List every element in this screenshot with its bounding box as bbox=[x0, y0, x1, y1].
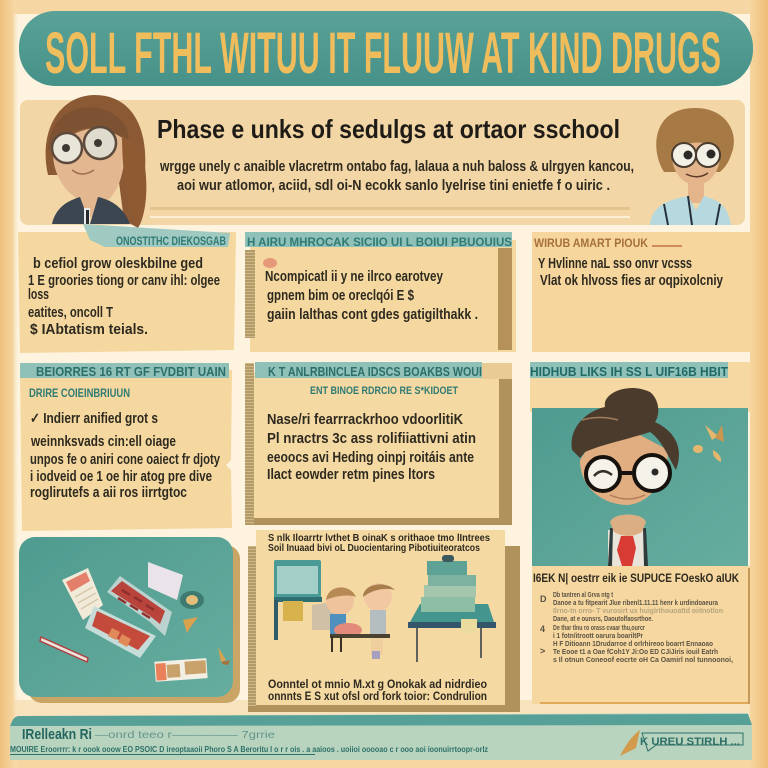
panel text: $ IAbtatism teials. bbox=[30, 322, 148, 338]
panel text: b cefiol grow oleskbilne ged bbox=[33, 256, 203, 272]
panel small text: Te Eooe t1 a Oae fCoh1Y Ji:Oo ED CJiJiris iouil Eatrh bbox=[553, 649, 718, 656]
footer band bbox=[10, 713, 752, 760]
panel small text: 4 bbox=[540, 624, 545, 634]
logo bbox=[620, 730, 743, 756]
icon: card bbox=[148, 562, 183, 600]
panel text: Ncompicatl ii y ne ilrco earotvey bbox=[265, 269, 443, 285]
panel text: Vlat ok hlvoss fies ar oqpixolcniy bbox=[540, 273, 723, 289]
icon: scattered pieces bbox=[183, 617, 230, 665]
header band bbox=[245, 232, 512, 247]
panel small text: Db tantren al Grva ntg t bbox=[553, 592, 614, 599]
panel text: Pl nractrs 3c ass rolifiiattivni atin bbox=[267, 431, 476, 447]
panel: medication illustration bbox=[19, 537, 240, 703]
panel small text: i 1 fotn/itroott oarura boariltPr bbox=[553, 633, 643, 640]
panel text: top: Soil Inuaad bivi oL Duocientaring Pibotiuiteoratcos bbox=[268, 542, 480, 554]
icon: capsule bbox=[180, 591, 204, 609]
icon: bullet bbox=[263, 258, 277, 268]
icon: cap bbox=[186, 595, 198, 605]
header band bbox=[530, 362, 728, 378]
icon: boy with glasses bbox=[650, 108, 734, 225]
panel heading: HIDHUB LIKS IH SS L UIF16B HBIT bbox=[530, 364, 728, 379]
panel small text bbox=[540, 592, 733, 664]
icon: children bbox=[312, 583, 395, 659]
panel heading: WIRUB AMART PIOUK bbox=[534, 236, 648, 250]
footer subtext: —onrd teeo r————— 7grrie bbox=[95, 730, 276, 741]
icon: cigarette bbox=[40, 637, 88, 662]
panel text: 1 E groories tiong or canv ihl: olgee bbox=[28, 273, 220, 289]
icon: computer desk bbox=[274, 560, 322, 640]
panel: top centre bbox=[245, 232, 516, 352]
icon: pill box bbox=[85, 576, 172, 658]
panel text: i iodveid oe 1 oe hir atog pre dive bbox=[30, 469, 212, 485]
panel: middle centre bbox=[245, 362, 512, 525]
intro text bbox=[159, 158, 634, 194]
icon: girl with glasses bbox=[46, 95, 146, 228]
panel text bbox=[265, 269, 478, 323]
panel text: bottom: Oonntel ot mnio M.xt g Onokak ad nidrdieo bbox=[268, 677, 487, 691]
footer heading: IRelleakn Ri bbox=[22, 726, 92, 743]
panel small text: Danoe a tu fitpearit Jlue ribenl1.11.11 henr k urdindoaeura bbox=[553, 600, 718, 607]
panel text: bottom bbox=[268, 677, 487, 703]
panel small text: Ilrno-tn orro- T vurosirt ux huiglrthouoattd oiitnotlon bbox=[553, 608, 723, 615]
panel text: top: S nlk Iloarrtr lvthet B oinaK s orithaoe tmo lIntrees bbox=[268, 532, 490, 544]
panel small text: > bbox=[540, 646, 545, 656]
icon: packet bbox=[154, 658, 208, 682]
panel text: unpos fe o aniri cone oaiect fr djoty bbox=[30, 452, 220, 468]
panel text: Nase/ri fearrrackrhoo vdoorlitiK bbox=[267, 412, 463, 428]
icon: leaflet bbox=[62, 568, 103, 620]
panel: character portrait bbox=[530, 362, 750, 566]
panel text bbox=[538, 256, 723, 289]
panel text: top bbox=[268, 532, 490, 554]
panel small text: Dane, at e ounsrs, Daoutolfaosrthoe. bbox=[553, 616, 653, 623]
teal background bbox=[532, 408, 748, 566]
panel heading: BEIORRES 16 RT GF FVDBIT UAIN bbox=[36, 364, 226, 379]
panel small text: H F Ditioann 1Drudarroe d orlrhireoo boarrt Ennaoao bbox=[553, 641, 713, 648]
icon: leaves bbox=[693, 425, 724, 462]
panel heading: ONOSTITHC DIEKOSGAB bbox=[116, 234, 226, 248]
title banner bbox=[19, 11, 753, 86]
intro heading: Phase e unks of sedulgs at ortaor sschool bbox=[157, 114, 620, 144]
icon: teacher bbox=[572, 388, 679, 566]
panel text: weinnksvads cin:ell oiage bbox=[30, 434, 176, 450]
intro text: wrgge unely c anaible vlacretrm ontabo fag, lalaua a nuh baloss & ulrgyen kancou, bbox=[159, 158, 634, 175]
panel: bottom right bbox=[532, 566, 750, 704]
panel small text: s Il otnun Coneoof eocrte oH Ca Oamirl nol tunnoonoi, bbox=[553, 657, 733, 664]
panel text: ✓ Indierr anified grot s bbox=[30, 411, 158, 427]
icon: stacked books on table bbox=[408, 555, 496, 662]
panel small text: D bbox=[540, 594, 547, 604]
header band bbox=[255, 362, 482, 378]
panel text: eeoocs avi Heding oinpj roitáis ante bbox=[267, 450, 474, 466]
panel subheading: DRIRE COIEINBRIUUN bbox=[29, 386, 130, 400]
panel text: Y Hvlinne naL sso onvr vcsss bbox=[538, 256, 692, 272]
panel: middle left bbox=[20, 363, 232, 531]
footer text: MOUIRE Eroorrrr: k r oook ooow EO PSOIC D ireoptaaoii Phoro S A Beroritu I o r r ois . a aaioos . uoiioi ooooao c r ooo aoi ioonuirrtoopr-orlz bbox=[10, 745, 488, 754]
intro text: aoi wur atlomor, aciid, sdl oi-N ecokk sanlo lyelrise tini enietfe f o uiric . bbox=[177, 177, 610, 194]
panel text: gpnem bim oe oreclqói E $ bbox=[267, 288, 414, 304]
logo: K UREU STIRLH ... bbox=[640, 736, 740, 748]
panel text bbox=[28, 256, 220, 338]
panel subheading: ENT BINOE RDRCIO RE S*KIDOET bbox=[310, 385, 458, 397]
panel text bbox=[30, 411, 220, 501]
panel: top right bbox=[532, 232, 750, 352]
panel text: roglirutefs a aii ros iirrtgtoc bbox=[30, 485, 187, 501]
header band bbox=[20, 363, 229, 378]
panel text: loss bbox=[28, 287, 49, 303]
panel small text: De thar tlnu ro orass cvaar thu,ourcr bbox=[553, 625, 645, 632]
panel text: Ilact eowder retm pines ltors bbox=[267, 467, 435, 483]
panel: top left bbox=[18, 224, 236, 353]
panel: classroom illustration bbox=[248, 530, 520, 712]
panel text bbox=[267, 412, 476, 483]
header band bbox=[83, 224, 230, 247]
panel heading: K T ANLRBINCLEA IDSCS BOAKBS WOUI bbox=[268, 364, 482, 379]
panel text: bottom: onnnts E S xut ofsl ord fork toior: Condrulion bbox=[268, 689, 487, 703]
panel heading: H AIRU MHROCAK SICIIO UI L BOIUI PBUOUIUS bbox=[247, 235, 512, 249]
panel text: gaiin lalthas cont gdes gatigilthakk . bbox=[267, 307, 478, 323]
panel text: eatites, oncoll T bbox=[28, 305, 113, 321]
panel: introduction bbox=[20, 100, 745, 225]
